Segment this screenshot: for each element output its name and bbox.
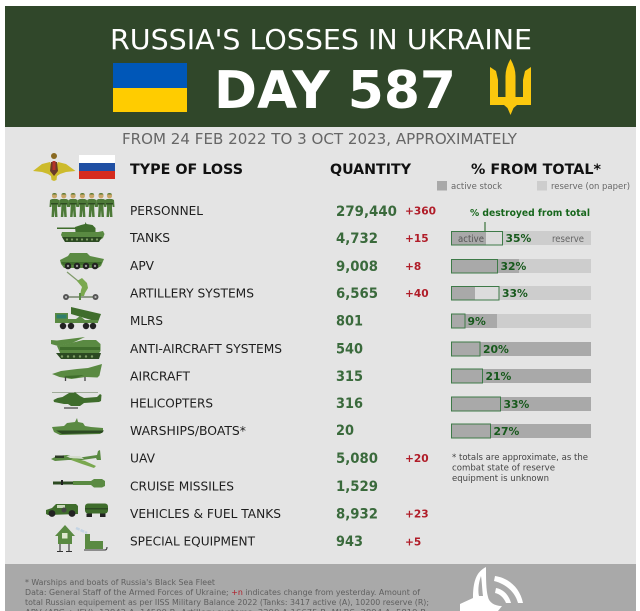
heading: type of loss: TYPE OF LOSS <box>130 161 243 178</box>
row labels: TANKS <box>129 230 170 245</box>
legend: reserve (on paper) <box>551 182 630 192</box>
quantities: 315 <box>336 369 363 385</box>
bar: anti-aircraft <box>451 342 591 356</box>
icon: hut on legs <box>55 525 75 552</box>
note: totals are approximate: combat state of reserve <box>452 464 555 474</box>
daily changes: +15 <box>405 233 429 245</box>
bar: tanks <box>451 231 591 245</box>
quantities <box>336 204 397 550</box>
bar: helicopters <box>451 397 591 411</box>
bar: tanks: 35% <box>506 232 532 245</box>
icon: MLRS <box>55 307 101 329</box>
quantities: 4,732 <box>336 231 378 247</box>
row labels: MLRS <box>130 313 163 328</box>
row labels: ARTILLERY SYSTEMS <box>130 286 254 300</box>
bar: MLRS <box>451 314 591 328</box>
quantities: 9,008 <box>336 259 378 275</box>
daily changes: +23 <box>405 508 429 520</box>
quantities: 8,932 <box>336 506 378 522</box>
daily changes: +40 <box>405 288 429 300</box>
row labels: SPECIAL EQUIPMENT <box>130 534 255 548</box>
quantities: 6,565 <box>336 286 378 302</box>
row labels: WARSHIPS/BOATS* <box>130 423 246 438</box>
panel: header <box>5 6 636 127</box>
bar: aircraft: 21% <box>486 370 512 383</box>
icon: aircraft <box>52 364 102 381</box>
row labels: UAV <box>130 450 156 466</box>
footer text: Data: General Staff of the Armed Forces of Ukraine; +n indicates change from yesterday. Amount of <box>25 588 420 597</box>
row labels: PERSONNEL <box>130 203 203 218</box>
icon: trident <box>490 59 531 115</box>
quantities: 801 <box>336 314 363 330</box>
row labels: CRUISE MISSILES <box>130 478 234 494</box>
day counter: DAY 587 <box>214 61 456 121</box>
quantities: 316 <box>336 396 363 412</box>
legend <box>437 181 630 192</box>
bar: helicopters: 33% <box>504 398 530 411</box>
footer text: total Russian equipement as per IISS Military Balance 2022 (Tanks: 3417 active (A), 10200 reserve (R); <box>25 598 429 607</box>
icon: personnel <box>50 193 114 217</box>
heading: quantity: QUANTITY <box>330 161 411 178</box>
note: totals are approximate <box>452 453 588 484</box>
icon: warship <box>52 418 104 435</box>
icon: APV <box>60 253 104 269</box>
heading: percent from total: % FROM TOTAL* <box>471 161 601 178</box>
row labels: APV <box>130 258 155 273</box>
callout: percent destroyed: % destroyed from total <box>470 208 590 219</box>
bar: MLRS: 9% <box>468 315 486 328</box>
bar: tanks: active <box>458 234 484 245</box>
footer text: * Warships and boats of Russia's Black Sea Fleet <box>25 578 215 587</box>
quantities: 1,529 <box>336 479 378 495</box>
icon: Ukrainian flag <box>113 63 187 112</box>
bar: warships: 27% <box>494 425 520 438</box>
row labels: VEHICLES & FUEL TANKS <box>130 506 281 521</box>
bar: aircraft <box>451 369 591 383</box>
bar: APV <box>451 259 591 273</box>
title: RUSSIA'S LOSSES IN UKRAINE <box>110 23 532 56</box>
icon: helicopter <box>52 392 102 408</box>
quantities: 540 <box>336 342 363 358</box>
bar: APV: 32% <box>500 260 527 273</box>
bar: tanks: reserve <box>552 234 584 245</box>
icon: tank <box>57 222 104 242</box>
icon: anti-aircraft <box>51 337 101 359</box>
panel: main background <box>5 127 636 564</box>
bar chart: percent from total <box>451 231 591 438</box>
panel: footer <box>5 564 636 611</box>
daily changes: +20 <box>405 453 429 465</box>
row labels: ANTI-AIRCRAFT SYSTEMS <box>130 341 282 356</box>
daily changes: +5 <box>405 536 421 548</box>
icon: Russian armed forces emblem <box>33 153 76 181</box>
daily changes: +8 <box>405 261 421 273</box>
icon: Russian flag <box>79 155 115 179</box>
icon: vehicle <box>46 504 78 517</box>
footer text <box>25 578 429 611</box>
bar: warships <box>451 424 591 438</box>
note: totals are approximate: * totals are approximate, as the <box>452 453 588 463</box>
quantities: 5,080 <box>336 451 378 467</box>
daily changes: +360 <box>405 206 436 218</box>
icon: fuel tank <box>85 504 108 517</box>
bar: artillery <box>451 286 591 300</box>
icon: UAV <box>51 450 101 468</box>
row labels: AIRCRAFT <box>130 368 190 384</box>
row labels <box>129 203 282 548</box>
icon: cruise missile <box>53 479 105 488</box>
quantities: 20 <box>336 423 354 439</box>
bar: artillery: 33% <box>502 287 528 300</box>
quantities: 279,440 <box>336 204 397 220</box>
subtitle: FROM 24 FEB 2022 TO 3 OCT 2023, APPROXIMATELY <box>122 130 518 148</box>
icon: footer logo <box>460 567 523 611</box>
row labels: HELICOPTERS <box>130 396 213 410</box>
callout: percent destroyed <box>470 208 590 231</box>
icon: sled stove <box>76 528 107 550</box>
bar: anti-aircraft: 20% <box>483 343 509 356</box>
daily changes <box>405 206 436 548</box>
icon: artillery <box>63 272 98 300</box>
note: totals are approximate: equipment is unknown <box>452 474 549 484</box>
quantities: 943 <box>336 534 363 550</box>
legend: active stock <box>451 182 503 192</box>
